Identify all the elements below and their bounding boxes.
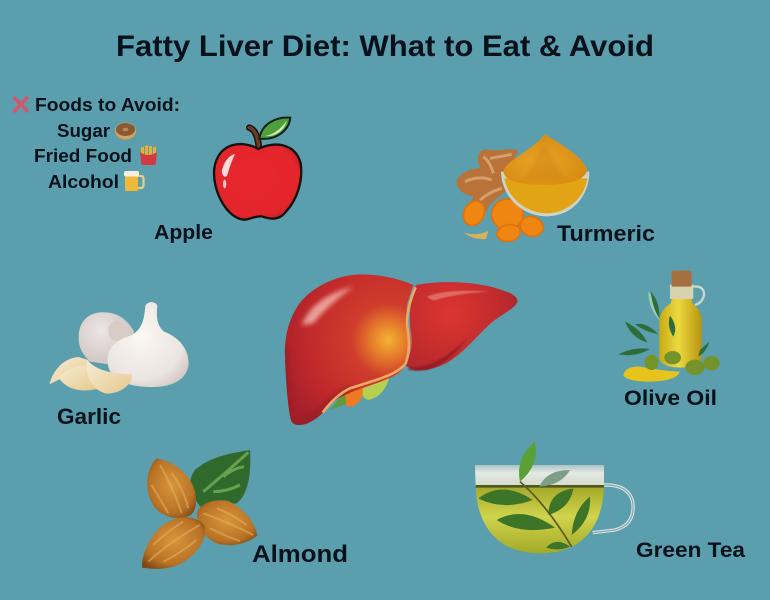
turmeric slices — [460, 198, 546, 243]
turmeric root ridges — [465, 154, 512, 200]
cork — [672, 271, 692, 287]
icon: almond — [142, 450, 257, 569]
turmeric bowl — [501, 172, 589, 216]
icon: green tea — [475, 442, 633, 553]
turmeric crumbs — [463, 231, 488, 239]
icon: red cross — [14, 97, 28, 112]
text: fried food: Fried Food — [34, 146, 132, 166]
tea stem — [520, 482, 572, 547]
liver left lobe shading — [285, 347, 350, 425]
olives — [645, 351, 720, 375]
label: olive oil: Olive Oil — [624, 387, 717, 410]
icon: beer mug — [124, 171, 144, 191]
oil puddle — [623, 367, 680, 382]
text: sugar: Sugar — [57, 121, 110, 141]
garlic back bulb — [79, 312, 134, 367]
heading: foods to avoid: Foods to Avoid: — [35, 95, 180, 115]
icon: apple — [214, 118, 301, 220]
cup handle — [593, 485, 633, 533]
apple leaf — [259, 118, 290, 139]
garlic cloves — [49, 357, 91, 384]
icon: donut — [115, 122, 136, 140]
label: apple: Apple — [154, 222, 213, 244]
icon: turmeric — [457, 134, 589, 243]
garlic front bulb — [107, 302, 189, 387]
label: turmeric: Turmeric — [557, 221, 655, 246]
almond nuts — [142, 458, 257, 569]
turmeric powder — [503, 134, 587, 185]
turmeric root — [457, 149, 518, 225]
title: Fatty Liver Diet: What to Eat & Avoid — [116, 30, 654, 63]
olive branch leaves — [618, 292, 709, 357]
apple stem — [249, 128, 259, 148]
liver left lobe — [285, 274, 413, 425]
liver highlights — [302, 287, 353, 325]
icon: fries — [140, 146, 157, 165]
oil bottle — [659, 295, 702, 368]
almond leaf — [190, 450, 250, 507]
label: garlic: Garlic — [57, 404, 121, 429]
label: green tea: Green Tea — [636, 539, 745, 562]
bottle handle — [692, 286, 704, 305]
text: alcohol: Alcohol — [48, 172, 119, 192]
label: almond: Almond — [252, 541, 348, 568]
leaf above cup — [519, 442, 536, 482]
cup rim — [475, 465, 604, 488]
liver right lobe — [405, 282, 517, 370]
icon: garlic — [49, 302, 189, 394]
panel: foods to avoid — [14, 95, 180, 192]
tea liquid — [476, 487, 604, 553]
almond ridges — [148, 465, 253, 562]
tea leaves — [478, 488, 590, 549]
illustration: liver — [285, 274, 517, 425]
liver small organs — [361, 375, 390, 400]
liver ligament — [323, 287, 416, 413]
apple highlight — [222, 154, 235, 177]
bottle neck — [670, 284, 693, 299]
apple body — [214, 144, 301, 220]
icon: olive oil — [618, 271, 720, 382]
